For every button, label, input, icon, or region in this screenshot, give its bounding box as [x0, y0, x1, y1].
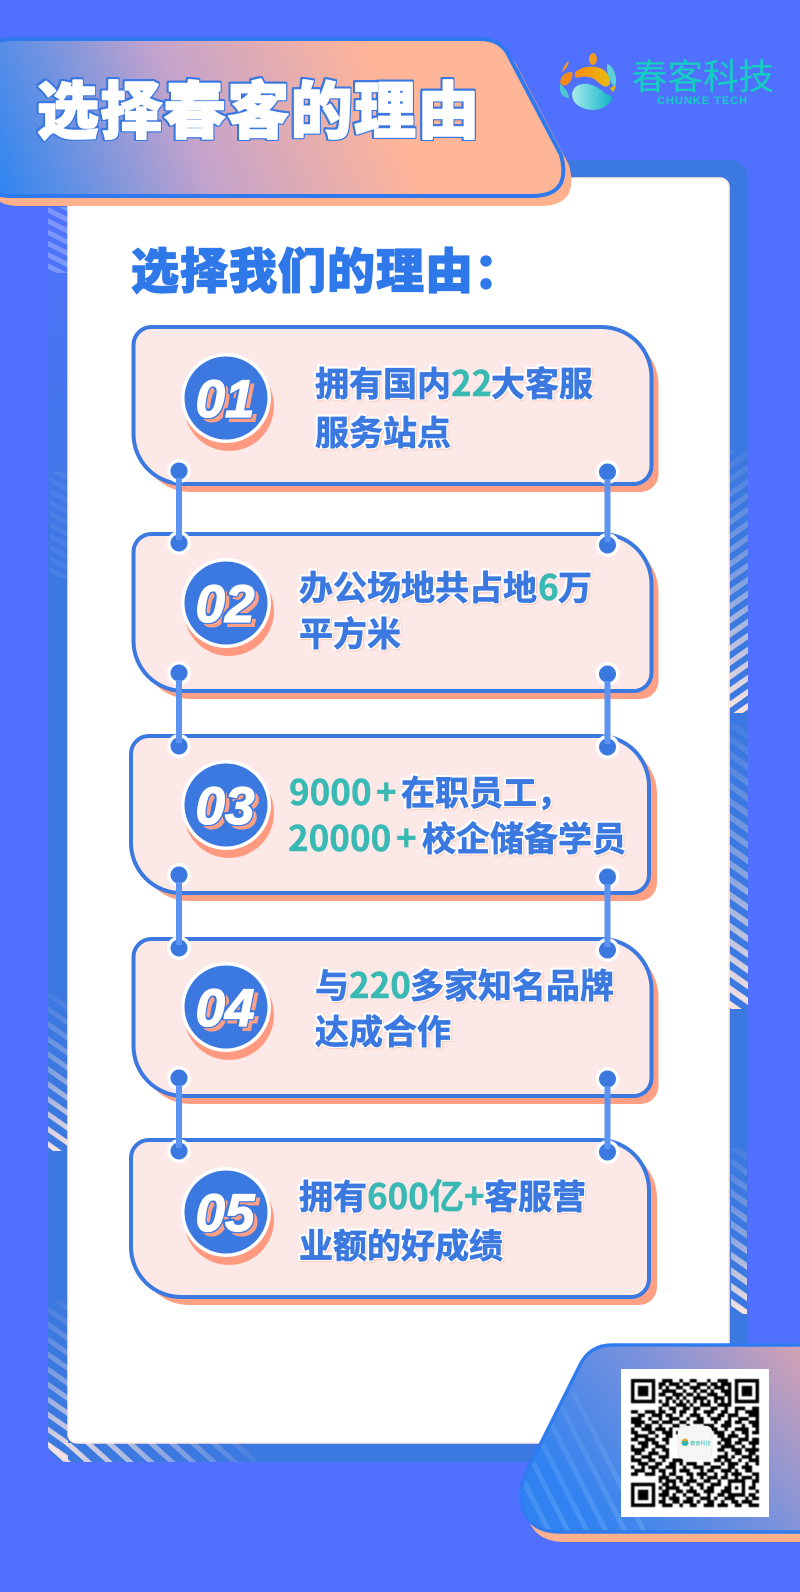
header banner [0, 39, 571, 206]
panel: card 5 [131, 1140, 657, 1305]
text: reason 2 [299, 560, 592, 654]
subheading: ： [474, 246, 523, 299]
text: reason 4 [315, 958, 614, 1052]
number badge 01 [181, 353, 274, 451]
text: reason 1: 服务站点 [315, 415, 451, 453]
number badge 02 [181, 558, 274, 656]
panel: card 2 [134, 534, 658, 699]
logo [560, 53, 774, 110]
logo english name: CHUNKE TECH [657, 95, 748, 107]
text: reason 1: 拥有国内 [315, 366, 451, 404]
panel: outer frame [48, 160, 748, 1462]
subheading: 选择我们的理由 [131, 246, 474, 299]
number badge 02: 02 [196, 575, 254, 634]
panel: card 3 [131, 736, 657, 901]
panel: QR code corner [519, 1343, 800, 1542]
text: reason 2: 办公场地共占地 [299, 570, 537, 608]
text: reason 5: 业额的好成绩 [299, 1228, 503, 1266]
text: reason 5: 拥有 [299, 1179, 367, 1217]
QR center logo [678, 1426, 712, 1459]
panel: card 1 [134, 327, 658, 492]
number badge 01: 01 [200, 374, 258, 433]
icon: logo mark [560, 53, 616, 110]
number badge 03: 03 [200, 781, 258, 840]
number badge 03: 03 [196, 777, 254, 836]
text: reason 1: 大客服 [491, 366, 593, 404]
text: reason 1: 22 [451, 356, 492, 407]
text: reason 2: 6 [538, 560, 559, 611]
title: 选择春客的理由 [37, 78, 481, 147]
text: reason 3: + [396, 811, 417, 862]
QR center logo: 春客科技 [690, 1439, 711, 1447]
number badge 01: 01 [196, 370, 254, 429]
text: reason 3 [288, 765, 626, 862]
number badge 03 [181, 760, 274, 858]
text: reason 5: 客服营 [484, 1179, 586, 1217]
text: reason 4: 多家知名品牌 [410, 968, 614, 1006]
QR code [621, 1369, 769, 1517]
text: reason 2: 平方米 [299, 616, 401, 654]
logo name: 春客科技 [632, 57, 774, 97]
number badge 02: 02 [200, 579, 258, 638]
text: reason 1 [315, 356, 593, 453]
text: reason 3: 20000 [288, 811, 391, 862]
number badge 05: 05 [196, 1184, 256, 1243]
text: reason 5 [299, 1169, 586, 1266]
number badge 04: 04 [200, 983, 258, 1042]
number badge 04 [181, 962, 274, 1060]
panel: white content area [68, 178, 729, 1443]
connectors between cards [167, 459, 620, 1164]
number badge 05: 05 [200, 1188, 260, 1247]
text: reason 4: 与 [315, 968, 349, 1006]
text: reason 4: 220 [349, 958, 411, 1009]
panel: card 4 [134, 939, 658, 1104]
text: reason 3: + [376, 765, 397, 816]
number badge 05 [181, 1167, 274, 1265]
text: reason 2: 万 [558, 570, 592, 608]
text: reason 3: 9000 [289, 765, 372, 816]
text: reason 3: 校企储备学员 [422, 821, 626, 859]
text: reason 3: 在职员工， [401, 775, 571, 813]
text: reason 4: 达成合作 [315, 1014, 451, 1052]
text: reason 5: 600亿+ [367, 1169, 485, 1220]
number badge 04: 04 [196, 979, 254, 1038]
